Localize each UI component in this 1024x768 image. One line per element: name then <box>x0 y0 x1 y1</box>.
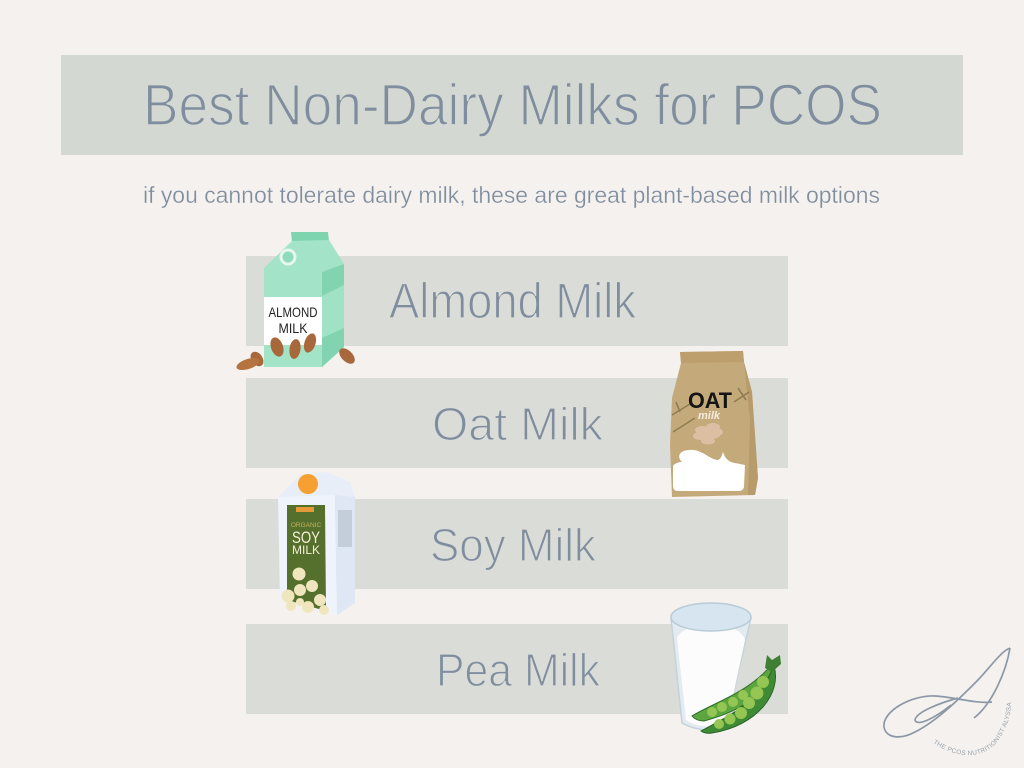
subtitle: if you cannot tolerate dairy milk, these are great plant-based milk options <box>143 182 880 208</box>
icon: soy milk carton: MILK <box>292 543 320 557</box>
title: Best Non-Dairy Milks for PCOS <box>143 73 882 138</box>
title banner <box>61 55 963 155</box>
icon: glass of pea milk with pod <box>671 603 781 733</box>
bag brand text: OAT <box>688 388 733 413</box>
logo: script monogram <box>883 647 1012 756</box>
icon: oat milk bag <box>670 351 758 497</box>
label: oat milk: Oat Milk <box>432 398 604 450</box>
panel: pea milk row <box>246 624 788 714</box>
logo tagline: THE PCOS NUTRITIONIST ALYSSA <box>934 702 1012 756</box>
label: pea milk: Pea Milk <box>436 644 601 696</box>
carton label text: ALMOND <box>268 304 318 320</box>
panel: almond milk row <box>246 256 788 346</box>
panel: oat milk row <box>246 378 788 468</box>
icon: almond milk carton <box>235 232 358 372</box>
oat cluster <box>693 423 723 444</box>
icon: soy milk carton: SOY <box>292 528 320 547</box>
icon: oat milk bag: milk <box>698 410 721 422</box>
carton label text: ORGANIC <box>291 522 321 529</box>
label: almond milk: Almond Milk <box>389 273 637 329</box>
icon: soy milk carton <box>278 472 355 615</box>
panel: soy milk row <box>246 499 788 589</box>
label: soy milk: Soy Milk <box>430 519 597 571</box>
icon: almond milk carton: MILK <box>278 320 308 336</box>
